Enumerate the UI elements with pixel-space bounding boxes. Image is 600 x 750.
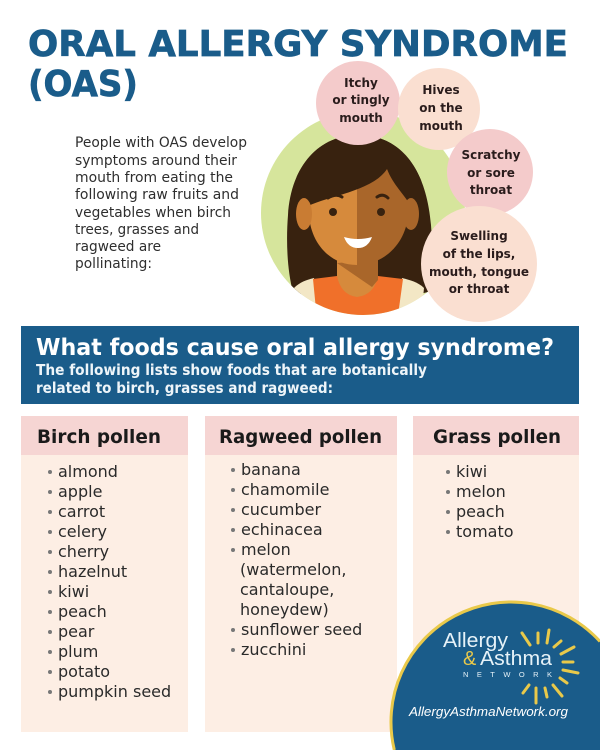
symptom bubble: hives: on the [419,101,463,115]
panel: ragweed pollen: sunflower seed [241,620,362,639]
symptom bubble: scratchy throat: throat [470,183,512,197]
logo: Allergy & Asthma Network badge: NETWORK [463,670,552,679]
panel: birch pollen: Birch pollen [37,426,161,448]
panel: ragweed pollen: honeydew) [240,600,329,619]
logo: Allergy & Asthma Network badge: & [463,648,477,670]
panel: ragweed pollen: zucchini [241,640,306,659]
panel: birch pollen: pumpkin seed [58,682,171,701]
title: ORAL ALLERGY SYNDROME [28,24,568,65]
symptom bubble: itchy mouth: mouth [339,111,383,125]
symptom bubble: scratchy throat [447,129,533,215]
panel: ragweed pollen: melon [241,540,291,559]
panel: grass pollen: tomato [456,522,514,541]
symptom bubble: swelling [421,206,537,322]
banner: what foods cause oral allergy syndrome: What foods cause oral allergy syndrome? [36,335,554,361]
symptom bubble: swelling: mouth, tongue [429,265,529,279]
panel: birch pollen: carrot [58,502,105,521]
panel: grass pollen: Grass pollen [433,426,561,448]
panel: birch pollen: kiwi [58,582,89,601]
intro text: vegetables when birch [75,205,231,221]
panel: ragweed pollen: cantaloupe, [240,580,334,599]
panel: ragweed pollen [205,416,397,732]
banner: what foods cause oral allergy syndrome [21,326,579,404]
panel: birch pollen: almond [58,462,118,481]
banner: what foods cause oral allergy syndrome: The following lists show foods that are botanically [36,361,427,379]
panel: birch pollen: plum [58,642,98,661]
intro text: mouth from eating the [75,170,233,186]
icon: sun rays [522,630,578,703]
intro text: People with OAS develop [75,135,247,151]
symptom bubble: hives: Hives [422,83,460,97]
panel: birch pollen: celery [58,522,107,541]
panel: grass pollen: melon [456,482,506,501]
title [28,24,568,105]
intro text: trees, grasses and [75,222,199,238]
symptom bubble: itchy mouth: or tingly [332,93,390,107]
panel: birch pollen: apple [58,482,102,501]
symptom bubble: hives: mouth [419,119,463,133]
symptom bubble: hives [398,68,480,150]
panel: birch pollen: hazelnut [58,562,127,581]
logo: Allergy & Asthma Network badge: Asthma [480,648,553,670]
panel: grass pollen [413,416,579,732]
panel: birch pollen: pear [58,622,95,641]
panel: grass pollen: peach [456,502,505,521]
symptom bubble: scratchy throat: Scratchy [462,148,521,162]
symptom bubble: swelling: of the lips, [443,247,515,261]
title: (OAS) [28,64,138,105]
panel: birch pollen: peach [58,602,107,621]
panel: birch pollen: cherry [58,542,109,561]
intro text: following raw fruits and [75,187,239,203]
symptom bubble: swelling: or throat [449,282,510,296]
intro text [75,135,247,272]
panel: ragweed pollen: echinacea [241,520,323,539]
panel: ragweed pollen: chamomile [241,480,329,499]
symptom bubble: swelling: Swelling [450,229,508,243]
illustration: woman with green circle [261,111,465,330]
panel: ragweed pollen: banana [241,460,301,479]
panel: ragweed pollen: Ragweed pollen [219,426,382,448]
symptom bubble: scratchy throat: or sore [467,166,515,180]
symptom bubble: itchy mouth: Itchy [344,76,378,90]
symptom bubble: itchy mouth [316,61,400,145]
intro text: symptoms around their [75,153,237,169]
intro text: ragweed are [75,239,161,255]
panel: grass pollen: kiwi [456,462,487,481]
panel: birch pollen: potato [58,662,110,681]
logo: Allergy & Asthma Network badge: AllergyAsthmaNetwork.org [408,704,569,719]
logo: Allergy & Asthma Network badge: Allergy [443,630,508,652]
panel: ragweed pollen: cucumber [241,500,321,519]
panel: birch pollen [21,416,188,732]
panel: ragweed pollen: (watermelon, [240,560,346,579]
logo: Allergy & Asthma Network badge [391,602,600,750]
banner: what foods cause oral allergy syndrome: related to birch, grasses and ragweed: [36,379,333,397]
intro text: pollinating: [75,256,152,272]
